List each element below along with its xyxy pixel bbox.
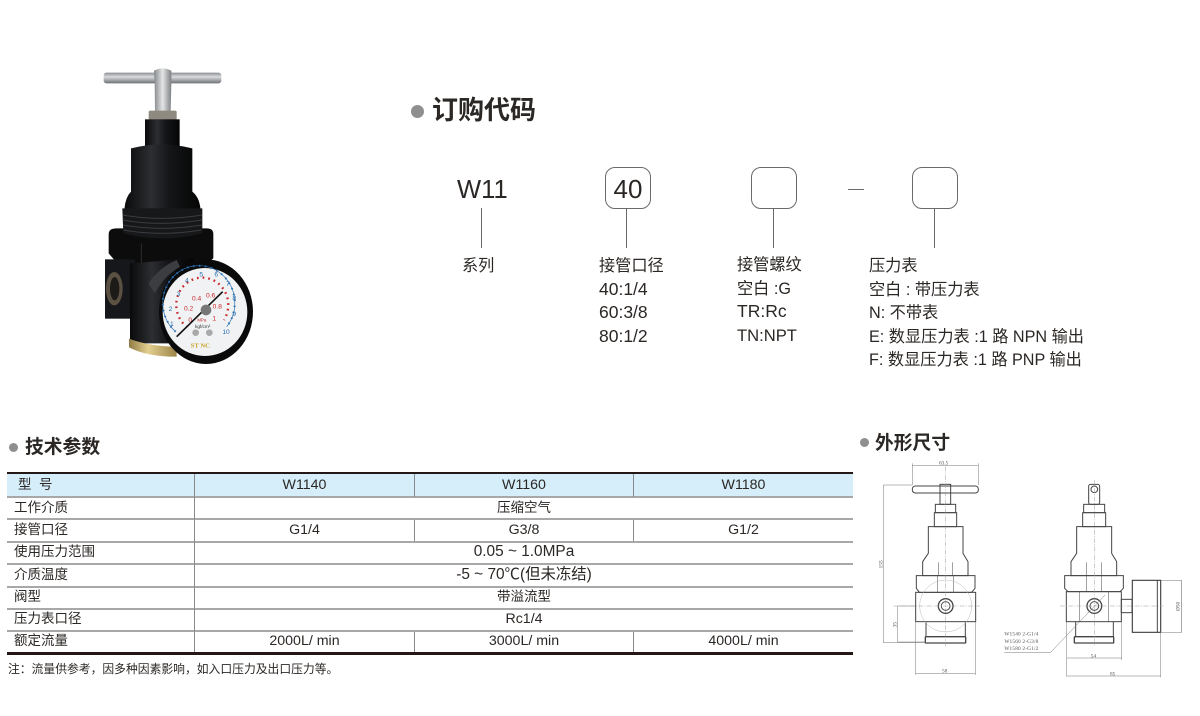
- product photo: pressure regulator: 10: [222, 329, 230, 336]
- table: technical parameters: 0.05 ~ 1.0MPa: [474, 543, 574, 560]
- connector: gauge: [934, 208, 935, 248]
- table: technical parameters: W1140: [283, 477, 326, 493]
- text: gauge options: 压力表: [869, 257, 918, 275]
- table: technical parameters: G3/8: [509, 522, 539, 538]
- code box: 40: [605, 167, 651, 209]
- connector: thread: [773, 208, 774, 248]
- heading: dimensions: [860, 432, 950, 453]
- heading text: 订购代码: [432, 95, 536, 125]
- product photo: pressure regulator: 6: [214, 272, 218, 279]
- bullet: [860, 438, 869, 447]
- code box: thread: [751, 167, 797, 209]
- text: port size options: 80:1/2: [599, 326, 648, 346]
- text: gauge options: [869, 257, 1084, 369]
- heading text: 外形尺寸: [875, 432, 950, 453]
- table header row: [7, 474, 853, 497]
- side view dimensions: [1004, 480, 1182, 677]
- code box: 40: 40: [614, 174, 642, 204]
- front view drawing: [912, 484, 978, 643]
- heading text: 技术参数: [25, 436, 100, 457]
- text: port size options: 40:1/4: [599, 278, 648, 298]
- bullet: [9, 443, 18, 452]
- text: port size options: [599, 256, 664, 346]
- connector: port size: [626, 208, 627, 248]
- bullet: [411, 105, 424, 118]
- dimension drawings: 58: [942, 669, 948, 675]
- product photo: pressure regulator: 1: [170, 321, 174, 328]
- table: technical parameters: W1180: [722, 477, 765, 493]
- text: thread options: 接管螺纹: [737, 256, 802, 274]
- product photo: pressure regulator: 9: [232, 311, 236, 318]
- dimension drawings: 63.5: [939, 461, 949, 467]
- dimension drawings: 85: [1110, 671, 1116, 677]
- product photo: pressure regulator: 3: [177, 291, 181, 298]
- table: technical parameters: 型 号: [18, 477, 53, 492]
- dimension drawings: Ø50: [1175, 601, 1181, 611]
- dimension drawings: 35: [893, 622, 899, 627]
- product photo: pressure regulator: 7: [226, 281, 230, 288]
- table: technical parameters: G1/2: [728, 522, 759, 538]
- dimension drawings: 54: [1091, 653, 1096, 659]
- code box: gauge: [912, 167, 958, 209]
- product photo: pressure regulator: 2: [169, 306, 173, 313]
- heading: ordering code: [411, 95, 536, 125]
- table: technical parameters: 使用压力范围: [14, 544, 95, 559]
- ordering code: series: [457, 176, 508, 275]
- table: technical parameters: G1/4: [289, 522, 320, 538]
- text: thread options: 空白 :G: [737, 280, 791, 298]
- text: port size options: 60:3/8: [599, 302, 648, 322]
- table: technical parameters: Rc1/4: [505, 611, 543, 627]
- product photo: pressure regulator: 0.6: [206, 292, 216, 299]
- text: thread options: TR:Rc: [737, 301, 787, 321]
- dimension drawings: 155: [878, 560, 884, 568]
- dimension drawings: [878, 461, 1182, 678]
- product photo: pressure regulator: 0: [188, 317, 192, 324]
- text: port size options: 接管口径: [599, 257, 664, 275]
- text: gauge options: N: 不带表: [869, 304, 938, 322]
- product photo: pressure regulator: 1: [212, 316, 216, 323]
- table: technical parameters: 3000L/ min: [489, 633, 559, 649]
- table: technical parameters: 压力表口径: [14, 611, 82, 626]
- side view drawing: [1065, 484, 1161, 643]
- dash separator: [848, 189, 864, 190]
- text: thread options: TN:NPT: [737, 326, 797, 344]
- table: technical parameters: 压缩空气: [497, 500, 551, 515]
- connector: [481, 208, 482, 248]
- table: technical parameters: 带溢流型: [497, 589, 551, 604]
- front view dimensions: [883, 463, 980, 675]
- table: technical parameters: W1160: [502, 477, 546, 493]
- product photo: pressure regulator: 0.4: [192, 296, 202, 303]
- text: gauge options: F: 数显压力表 :1 路 PNP 输出: [869, 351, 1082, 369]
- table: technical parameters: 阀型: [14, 589, 41, 604]
- dimension drawings: W1560 2-G3/8: [1004, 639, 1039, 645]
- table: technical parameters: 工作介质: [14, 500, 68, 515]
- dimension drawings: W1580 2-G1/2: [1004, 646, 1039, 652]
- product photo: pressure regulator: 0.8: [213, 303, 222, 310]
- table: technical parameters: -5 ~ 70℃(但未冻结): [456, 566, 592, 583]
- heading: technical parameters: [9, 436, 100, 457]
- text: gauge options: E: 数显压力表 :1 路 NPN 输出: [869, 328, 1084, 346]
- table: technical parameters: [7, 472, 853, 655]
- table: technical parameters: 2000L/ min: [269, 633, 340, 649]
- dimension drawings: W1540 2-G1/4: [1004, 632, 1039, 638]
- product photo: pressure regulator: 0.2: [184, 306, 194, 313]
- table: technical parameters: 介质温度: [14, 567, 68, 582]
- product photo: pressure regulator: ST NC: [191, 343, 210, 350]
- text: thread options: [737, 256, 802, 344]
- product photo: pressure regulator: kgf/cm²: [195, 324, 211, 329]
- table: technical parameters: 额定流量: [14, 633, 68, 648]
- product photo: pressure regulator: [104, 68, 253, 364]
- series code: W11: [457, 176, 508, 204]
- table: technical parameters: 接管口径: [14, 522, 68, 537]
- product photo: pressure regulator: 5: [199, 272, 203, 279]
- text: gauge options: 空白 : 带压力表: [869, 280, 980, 298]
- table: technical parameters: 4000L/ min: [708, 633, 779, 649]
- table footnote: 注：流量供参考，因多种因素影响，如入口压力及出口压力等。: [8, 662, 338, 676]
- product photo: pressure regulator: MPa: [197, 317, 207, 322]
- series label: 系列: [462, 257, 494, 275]
- product photo: pressure regulator: 4: [185, 277, 189, 284]
- product photo: pressure regulator: 8: [232, 295, 236, 302]
